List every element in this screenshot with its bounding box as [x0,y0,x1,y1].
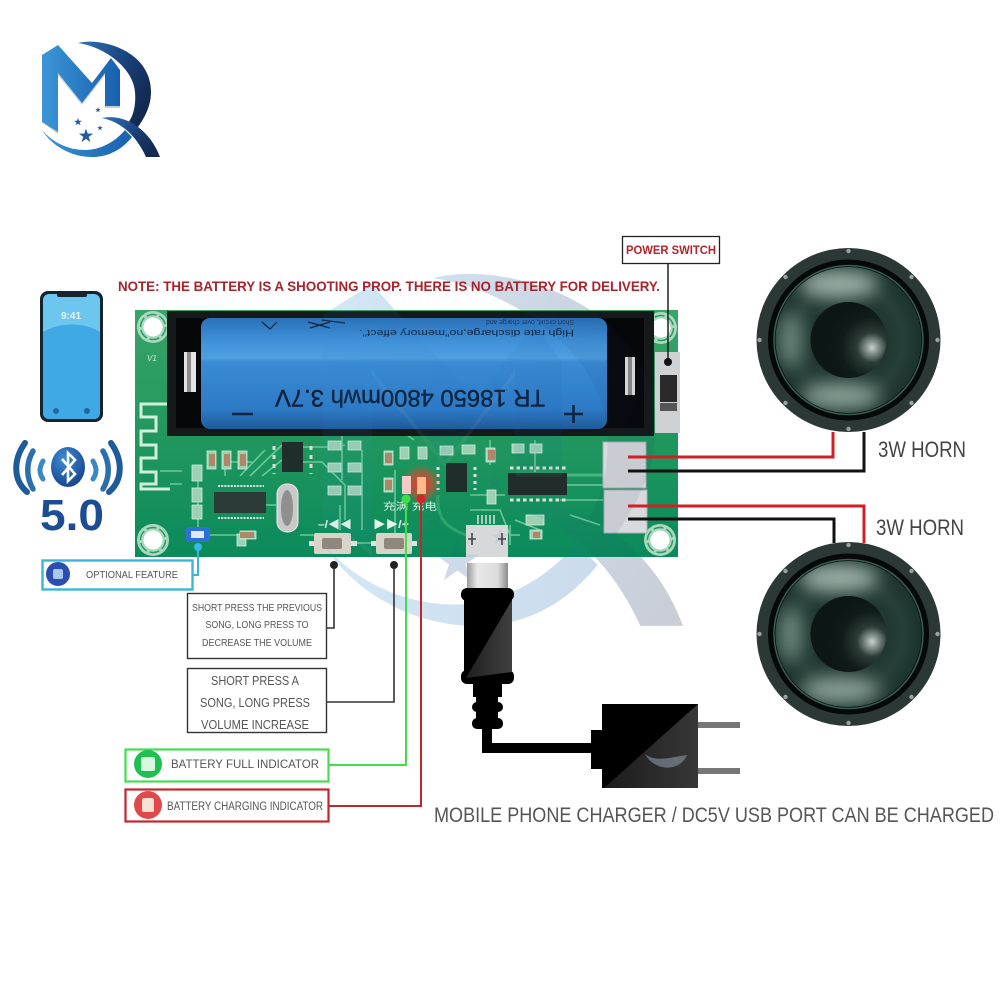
board mounting holes [137,311,677,556]
charger plug [591,704,740,788]
callout: previous song button: SONG, LONG PRESS TO [206,619,308,631]
bluetooth antenna trace [141,404,170,489]
battery capacity text: TR 18650 4800mwh 3.7V [275,384,545,411]
callout: battery charging indicator: BATTERY CHARGING INDICATOR [167,801,323,813]
callout: battery charging indicator [126,494,426,822]
logo: MQ brand mark [42,42,160,157]
battery fine print 2: Short circuit, over charge and [486,318,574,325]
button symbols right: ▶▶/+ [373,518,409,531]
crystal oscillator [277,484,298,532]
chip: amplifier left [438,463,475,492]
tactile buttons [309,533,417,554]
usb cable plug [461,563,595,753]
blue led [186,527,210,542]
note: battery prop warning: NOTE: THE BATTERY IS A SHOOTING PROP. THERE IS NO BATTERY FOR DELIVERY. [118,278,660,294]
battery logo [262,320,345,329]
small capacitors [209,450,540,538]
label: bottom horn: 3W HORN [876,515,964,540]
phone clock: 9:41 [61,311,81,322]
callout: previous song button [188,561,338,658]
speaker: bottom [756,542,940,726]
callout: previous song button: DECREASE THE VOLUME [202,637,312,649]
panel: circuit board [135,310,680,557]
wires: top speaker [628,432,864,471]
speaker connectors [603,442,647,533]
battery holder [167,311,654,436]
surface mount pads [192,441,544,546]
micro usb port [466,515,508,557]
slide power switch [655,352,680,433]
icon: bluetooth waves [16,443,120,492]
button symbols: –/◀◀ [318,518,352,531]
battery polarity marks [232,405,583,423]
chip: 8 pin [274,442,311,474]
watermark: large faded logo [323,274,683,626]
callout: optional feature [42,543,202,590]
callout: next song button: SHORT PRESS A [211,674,300,688]
label: top horn: 3W HORN [878,437,966,462]
charge label: 充满 充电 [383,500,437,513]
callout: optional feature: OPTIONAL FEATURE [86,570,178,581]
chip: audio decoder [214,486,266,518]
callout: battery full indicator: BATTERY FULL INDICATOR [171,757,319,771]
callout: power switch: POWER SWITCH [626,243,716,257]
callout: power switch [622,236,720,264]
power switch leader [664,264,672,366]
watermark over board: faint logo [323,311,656,557]
callout: next song button: SONG, LONG PRESS [200,696,310,710]
bluetooth version: 5.0 [40,491,104,540]
chip: amplifier right [508,468,567,500]
wires: bottom speaker [628,506,864,543]
callout: battery full indicator [126,494,410,782]
callout: previous song button: SHORT PRESS THE PREVIOUS [192,602,322,614]
red led glow [401,464,441,504]
battery fine print: High rate discharge,no"memory effect". [359,328,574,338]
speaker: top [756,248,940,432]
battery [201,318,607,429]
callout: next song button [188,561,398,732]
phone [40,291,103,422]
board silk text V1: V1 [147,354,157,363]
callout: next song button: VOLUME INCREASE [201,718,309,732]
circuit traces [160,430,603,545]
